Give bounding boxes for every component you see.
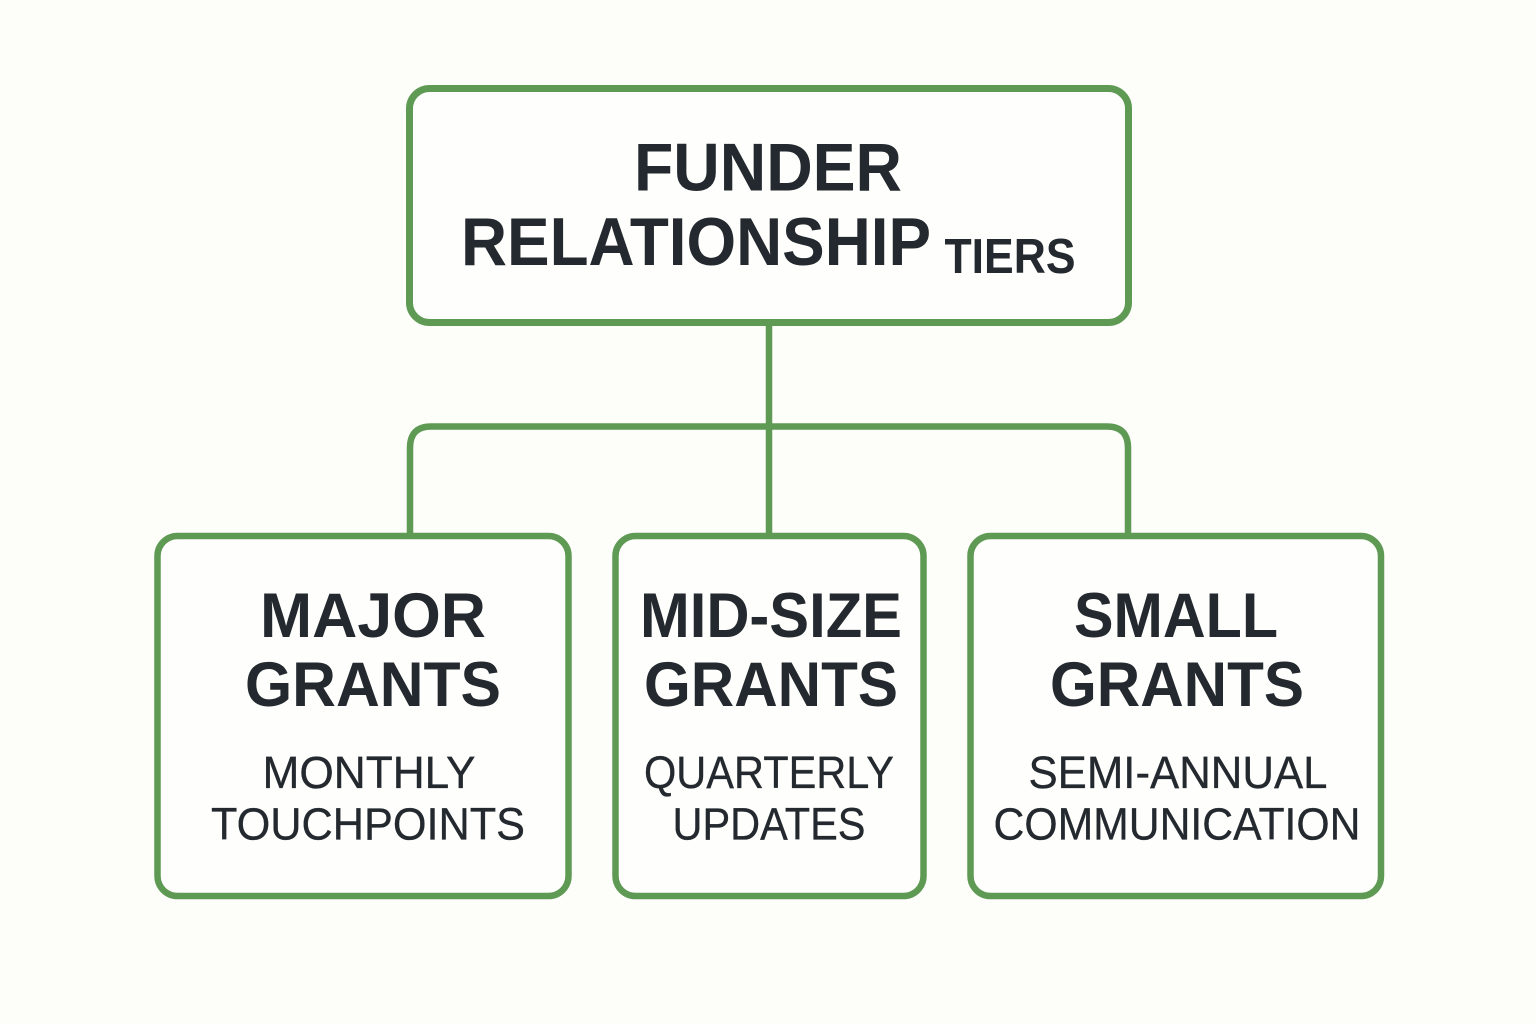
detail: semi-annual: SEMI-ANNUAL: [1028, 747, 1328, 798]
panel: mid-size grants: [616, 536, 924, 896]
title text: [461, 130, 1076, 284]
heading: small: SMALL: [1074, 581, 1278, 651]
heading line: grants: GRANTS: [1050, 650, 1304, 720]
connector lines: [410, 322, 1128, 534]
panel: major grants: [158, 536, 568, 896]
panel: small grants: [970, 536, 1381, 896]
detail: touchpoints: TOUCHPOINTS: [211, 798, 525, 850]
title text: TIERS: [944, 230, 1076, 284]
detail: communication: COMMUNICATION: [994, 798, 1360, 850]
heading line: grants: GRANTS: [245, 650, 501, 720]
heading: major grants: MAJOR: [260, 581, 486, 651]
detail: updates: UPDATES: [672, 798, 866, 850]
heading line: grants: GRANTS: [644, 650, 898, 720]
detail: quarterly: QUARTERLY: [644, 747, 894, 798]
title text: RELATIONSHIP: [461, 205, 931, 280]
heading: mid-size: MID-SIZE: [640, 581, 902, 651]
title box: [410, 88, 1128, 322]
title text: FUNDER: [634, 130, 902, 206]
detail: monthly: MONTHLY: [262, 747, 476, 798]
